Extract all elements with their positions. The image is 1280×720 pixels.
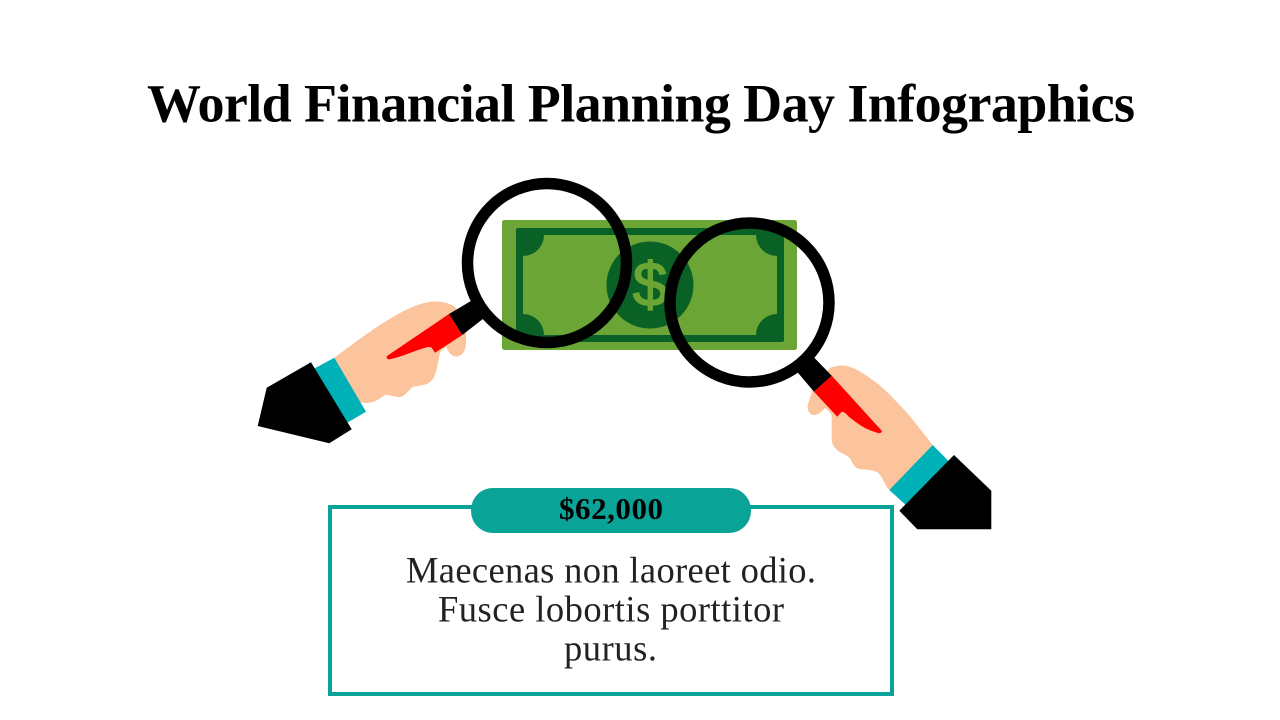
left hand skin (334, 302, 466, 403)
right magnifier lens (670, 223, 829, 382)
amount pill (471, 488, 751, 533)
left magnifier lens (468, 184, 626, 342)
panel border (330, 507, 892, 694)
banknote: $ (633, 251, 667, 320)
amount text: $62,000 (559, 491, 663, 526)
banknote (502, 220, 797, 350)
left hand red grip (387, 314, 462, 359)
right magnifier handle (793, 353, 832, 392)
right hand holding magnifier (793, 353, 991, 529)
right sleeve (899, 455, 991, 529)
callout panel (330, 488, 892, 694)
description text: purus. (564, 628, 657, 668)
left cuff (312, 358, 366, 424)
illustration: banknote under magnifiers (258, 184, 991, 529)
description text (406, 550, 816, 668)
left hand holding magnifier (258, 298, 488, 443)
right hand red grip (814, 376, 882, 433)
left sleeve (258, 362, 352, 443)
description text: Fusce lobortis porttitor (438, 588, 784, 630)
right cuff (889, 445, 951, 507)
left magnifier handle (449, 298, 488, 335)
description text: Maecenas non laoreet odio. (406, 550, 816, 590)
right hand skin (808, 366, 933, 490)
title: World Financial Planning Day Infographics (147, 74, 1135, 134)
